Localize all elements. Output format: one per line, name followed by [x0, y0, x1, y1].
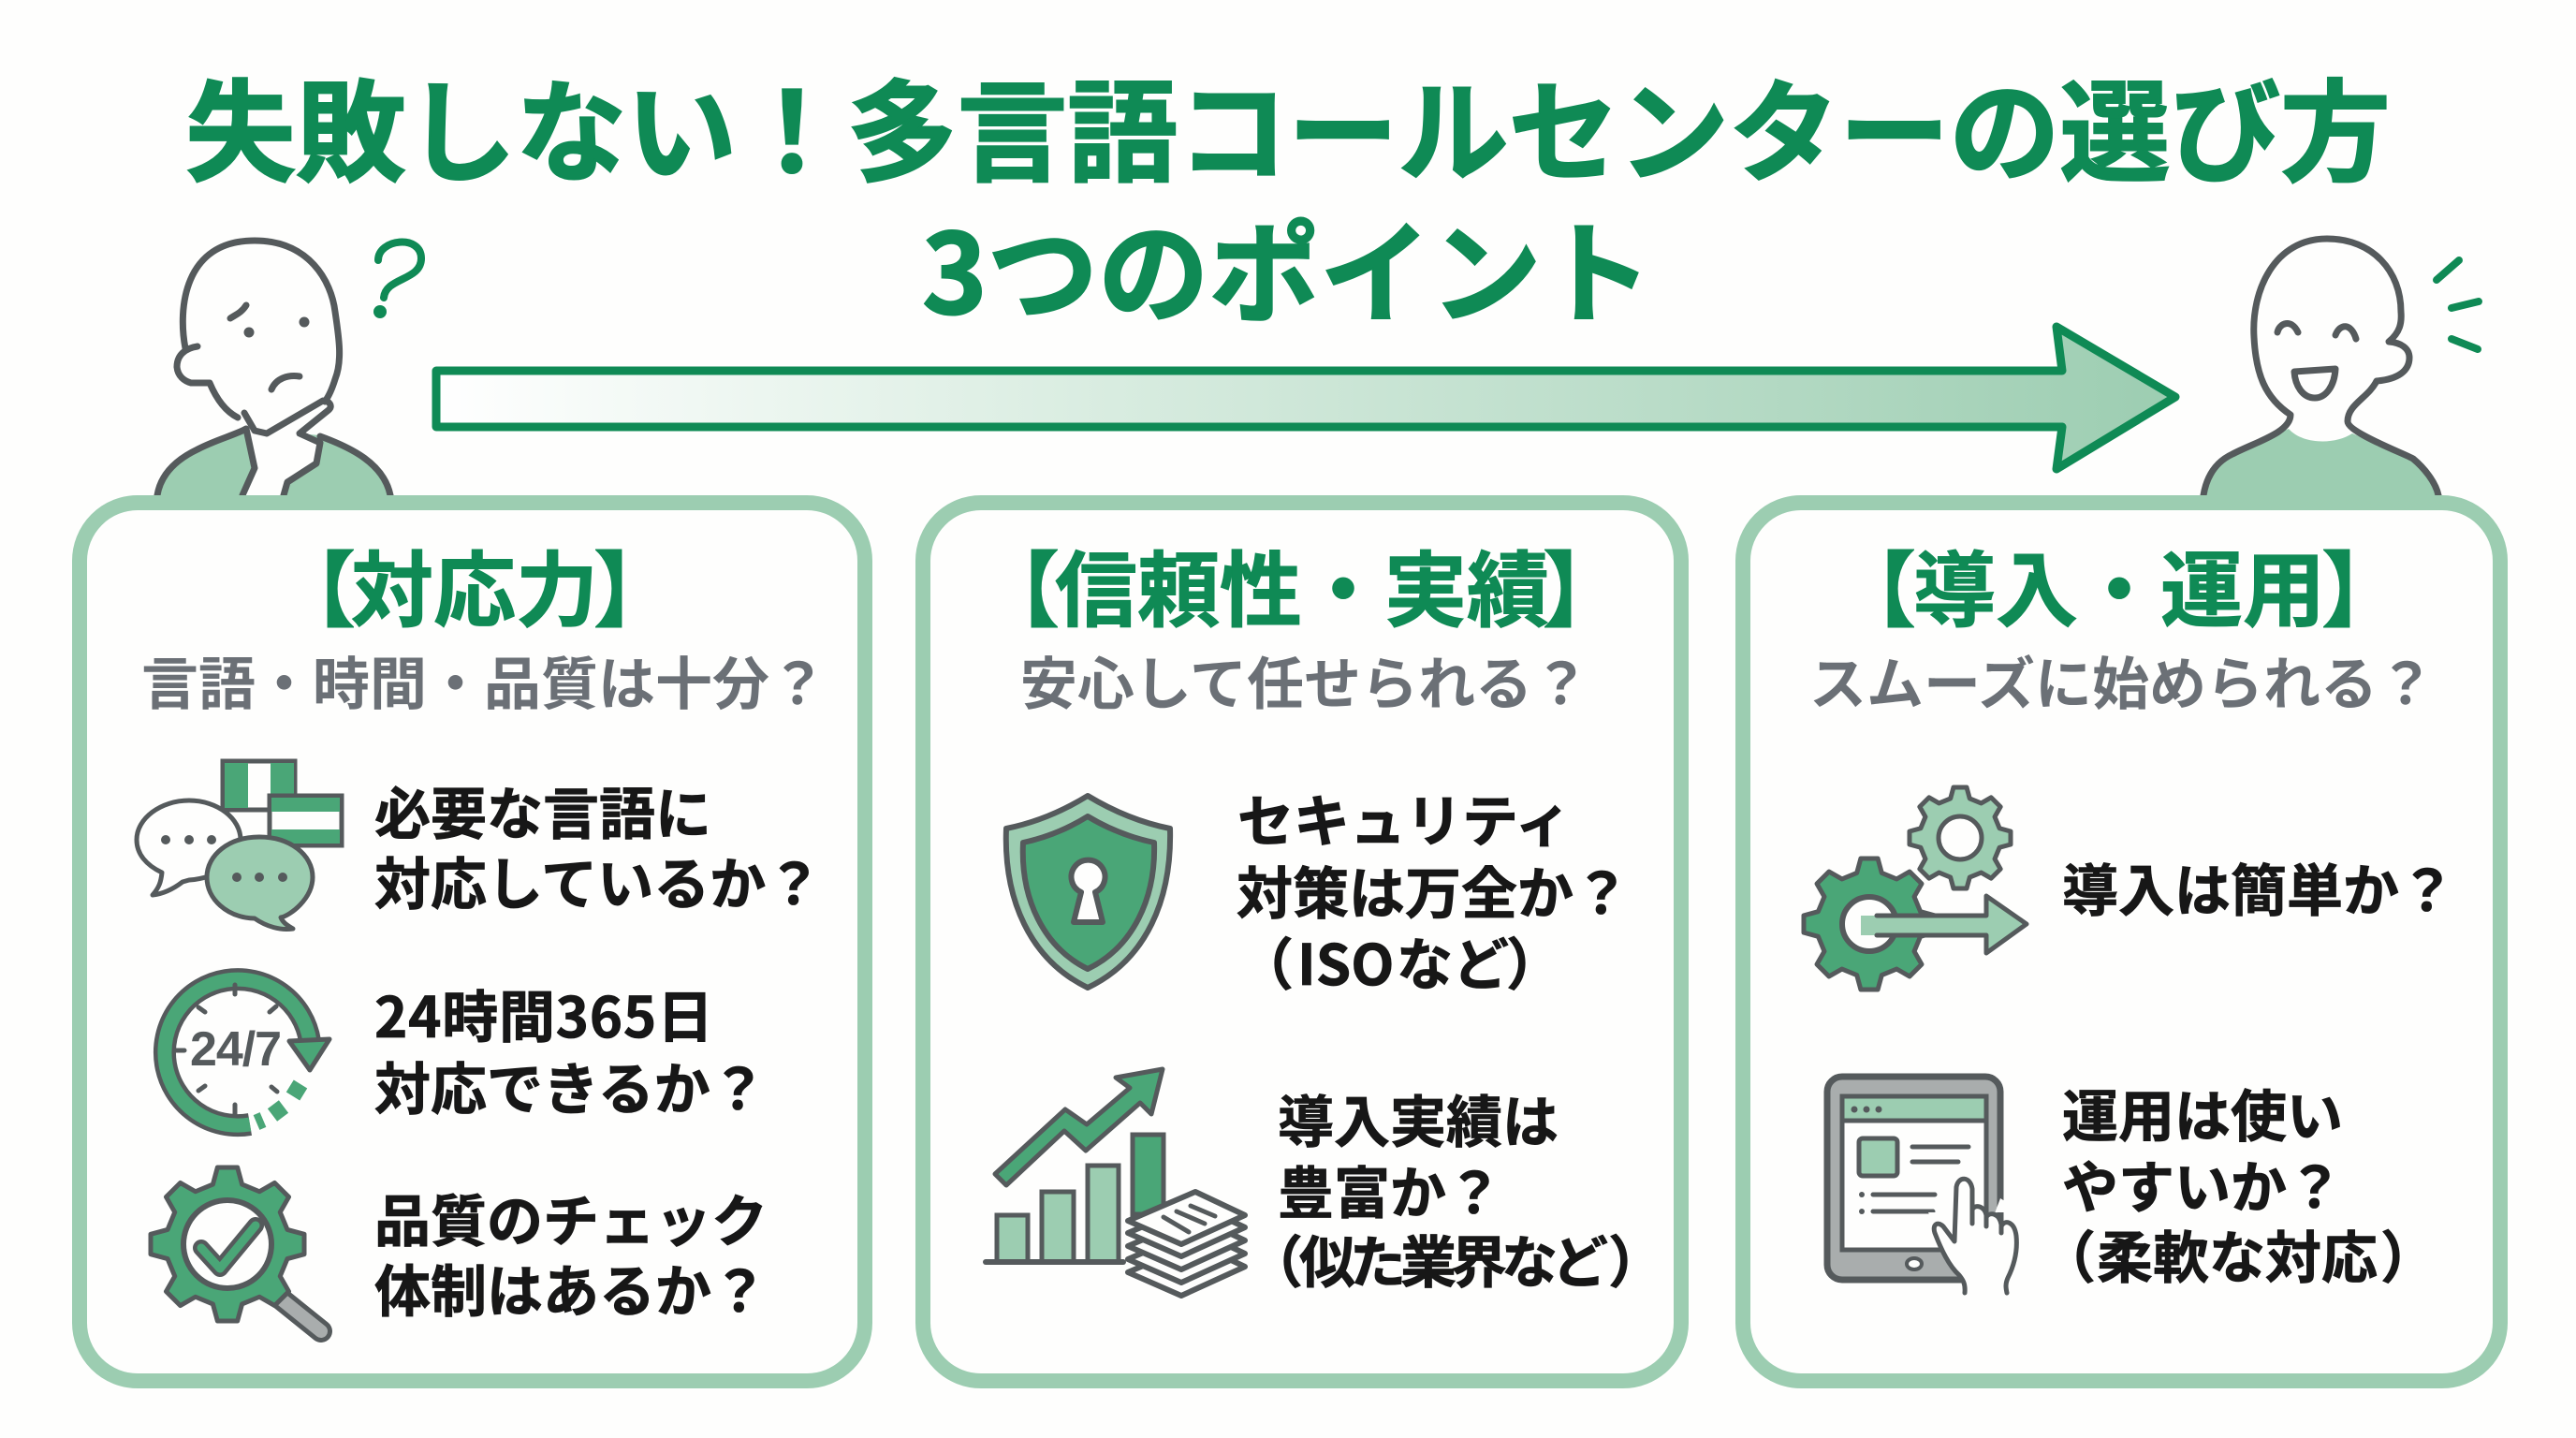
heading: 信頼性・実績: 【: [977, 545, 1060, 638]
checklist text: ）: [2380, 1227, 2437, 1290]
checklist text: など: [1397, 934, 1509, 997]
checklist text: ）: [1506, 934, 1562, 997]
icon: question mark: [373, 242, 421, 318]
heading: 対応力: 【: [273, 545, 356, 638]
icon: gears with arrow: [1804, 787, 2027, 990]
panel: 導入・運用: [1743, 503, 2500, 1381]
arrow: from worry to satisfaction: [436, 327, 2175, 469]
checklist text: 体制はあるか？: [374, 1261, 768, 1324]
icon: security shield: [1006, 796, 1170, 988]
checklist text: やすいか？: [2062, 1157, 2343, 1220]
checklist text: セキュリティ: [1237, 791, 1571, 854]
checklist text: ）: [1608, 1232, 1664, 1295]
checklist text: [374, 784, 822, 1324]
title: 失敗しない！多言語コールセンターの選び方: [185, 73, 2391, 197]
checklist text: 対策は万全か？: [1237, 863, 1630, 926]
checklist text: 対応できるか？: [374, 1059, 767, 1122]
heading: 信頼性・実績: 】: [1543, 545, 1625, 638]
checklist text: 運用は使い: [2062, 1086, 2343, 1149]
panel: 対応力: [80, 503, 865, 1381]
heading: 対応力: 対応力: [351, 545, 598, 638]
heading: 導入・運用: 【: [1834, 545, 1916, 638]
checklist text: 柔軟な対応: [2097, 1227, 2378, 1290]
icon: happy person: [2203, 239, 2479, 495]
subheading: 導入・運用: スムーズに始められる？: [1809, 653, 2435, 716]
checklist text: 必要な言語に: [374, 784, 711, 846]
icon: 24/7 clock: 24/7: [190, 1022, 282, 1077]
icon: growth chart and documents: [986, 1069, 1245, 1296]
checklist text: 導入実績は: [1278, 1092, 1559, 1154]
checklist text: 品質のチェック: [374, 1191, 768, 1254]
checklist text: 豊富か？: [1278, 1163, 1502, 1225]
checklist text: （: [1247, 1232, 1303, 1295]
checklist text: 導入は簡単か？: [2062, 860, 2455, 923]
checklist text: ISO: [1297, 920, 1394, 1002]
icon: speech bubbles and flags: [137, 761, 342, 930]
checklist text: [1237, 791, 1664, 1295]
subheading: 信頼性・実績: 安心して任せられる？: [1020, 653, 1589, 716]
checklist text: [2040, 860, 2455, 1290]
heading: 導入・運用: 】: [2321, 545, 2404, 638]
icon: worried person: [157, 241, 390, 495]
title: [185, 73, 2391, 345]
checklist text: （: [1237, 934, 1294, 997]
panel: 信頼性・実績: [923, 503, 1681, 1381]
heading: 対応力: 】: [593, 545, 676, 638]
checklist text: 似た業界など: [1299, 1232, 1608, 1295]
checklist text: 24時間365日: [374, 973, 713, 1054]
icon: gear with check and magnifier: [151, 1167, 321, 1331]
icon: tablet with pointing hand: [1827, 1077, 2031, 1293]
heading: 導入・運用: 導入・運用: [1913, 545, 2325, 638]
icon: 24/7 clock: [165, 979, 329, 1125]
checklist text: 対応しているか？: [374, 854, 822, 917]
heading: 信頼性・実績: 信頼性・実績: [1055, 545, 1549, 638]
subheading: 対応力: 言語・時間・品質は十分？: [141, 653, 827, 716]
title: 3つのポイント: [922, 185, 1652, 345]
checklist text: （: [2040, 1227, 2096, 1290]
